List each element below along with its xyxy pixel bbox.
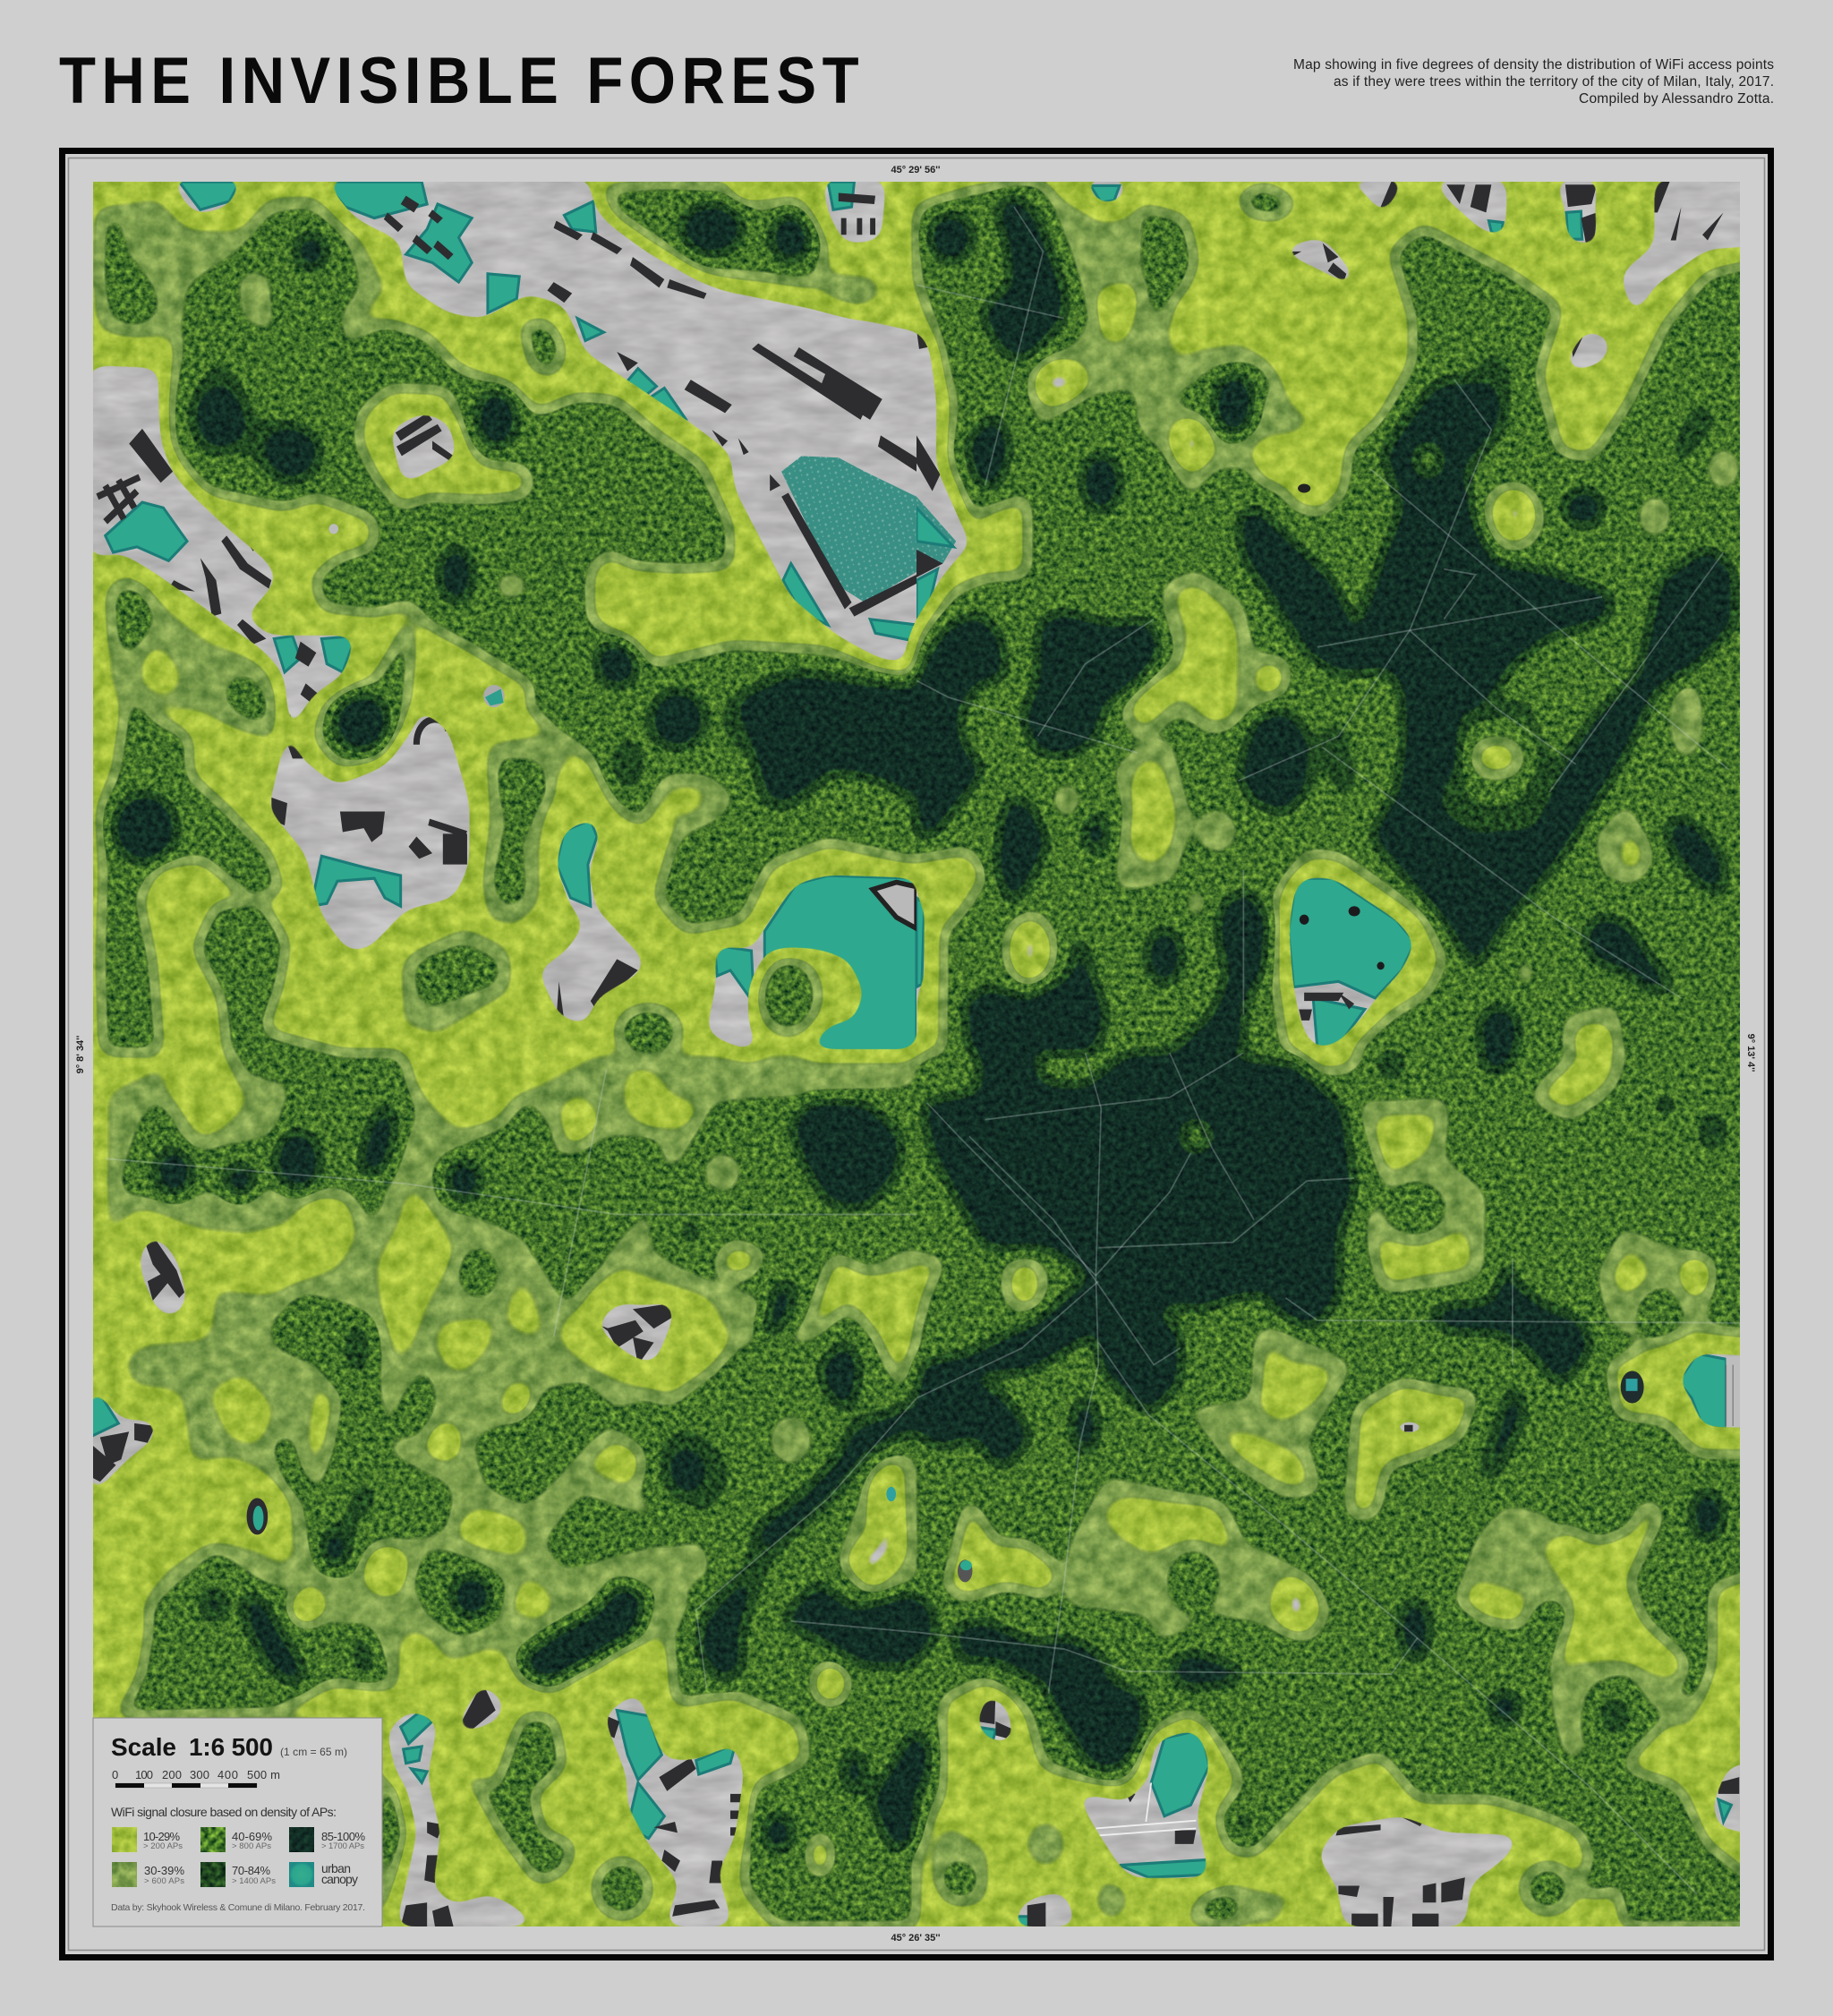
swatch label: 40-69%: > 800 APs bbox=[232, 1841, 271, 1851]
legend scale heading: 1:6 500 bbox=[189, 1733, 273, 1761]
description text block bbox=[1293, 57, 1774, 107]
swatch label: 70-84%: > 1400 APs bbox=[232, 1876, 276, 1886]
quadrant north-east density shapes bbox=[894, 182, 1740, 1076]
swatch label: 40-69%: 40-69% bbox=[232, 1830, 272, 1843]
coordinate label: left: 9° 8' 34'' bbox=[75, 1035, 86, 1073]
coordinate label: top: 45° 29' 56'' bbox=[891, 165, 941, 175]
quadrant south-east density shapes bbox=[893, 1029, 1740, 1926]
swatch label: 70-84% bbox=[232, 1864, 276, 1886]
legend panel bbox=[93, 1718, 382, 1926]
swatch label: 70-84%: 70-84% bbox=[232, 1864, 270, 1877]
swatch: 85-100% bbox=[289, 1827, 314, 1852]
scale bar labels bbox=[112, 1768, 280, 1781]
small urban clearings bbox=[247, 483, 1644, 1582]
swatch: 10-29% bbox=[112, 1827, 137, 1852]
legend subtitle: WiFi signal closure based on density of APs: bbox=[111, 1805, 337, 1819]
swatch label: 40-69% bbox=[232, 1830, 272, 1851]
description text block: Map showing in five degrees of density the distribution of WiFi access points bbox=[1293, 57, 1774, 73]
density layers: canopy closure contours bbox=[93, 182, 1740, 1926]
swatch label: 85-100%: 85-100% bbox=[321, 1830, 365, 1843]
scale bar bbox=[115, 1783, 257, 1788]
swatch label: 30-39%: > 600 APs bbox=[144, 1876, 184, 1886]
swatch label: 10-29%: > 200 APs bbox=[143, 1841, 183, 1851]
legend scale heading bbox=[111, 1733, 273, 1761]
swatch label: 30-39%: 30-39% bbox=[144, 1864, 184, 1877]
map of WiFi forest over Milan bbox=[93, 182, 1740, 1926]
swatch label: urban canopy bbox=[321, 1861, 358, 1886]
scale bar labels: 0 bbox=[112, 1768, 118, 1781]
road network over the dense canopy bbox=[106, 207, 1743, 1894]
scale bar labels: 200 bbox=[162, 1768, 182, 1781]
scale bar labels: 300 bbox=[190, 1768, 209, 1781]
coordinate label: right: 9° 13' 4'' bbox=[1745, 1034, 1756, 1072]
swatch: urban canopy bbox=[289, 1862, 314, 1887]
legend scale note: (1 cm = 65 m) bbox=[280, 1746, 347, 1758]
coordinate label: bottom: 45° 26' 35'' bbox=[891, 1933, 941, 1943]
quadrant north-west density shapes bbox=[93, 182, 941, 1078]
legend scale heading: Scale bbox=[111, 1733, 176, 1761]
swatch label: 85-100%: > 1700 APs bbox=[321, 1841, 364, 1851]
swatch label: 30-39% bbox=[144, 1864, 184, 1886]
scale bar labels: 500 m bbox=[247, 1768, 280, 1781]
urban ground layer: concrete, canopy and buildings bbox=[90, 179, 1745, 1930]
data credit: Data by: Skyhook Wireless & Comune di Milano. February 2017. bbox=[111, 1902, 365, 1913]
swatch label: urban canopy: urban bbox=[321, 1861, 351, 1875]
description text block: as if they were trees within the territory of the city of Milan, Italy, 2017. bbox=[1334, 74, 1774, 90]
title: THE INVISIBLE FOREST bbox=[59, 45, 865, 117]
quadrant south-west density shapes bbox=[93, 1029, 941, 1926]
swatch: 40-69% bbox=[200, 1827, 226, 1852]
swatch label: 85-100% bbox=[321, 1830, 365, 1851]
scale bar labels: 400 bbox=[217, 1768, 238, 1781]
swatch label: urban canopy: canopy bbox=[321, 1872, 358, 1886]
swatch: 70-84% bbox=[200, 1862, 226, 1887]
description text block: Compiled by Alessandro Zotta. bbox=[1579, 91, 1774, 107]
swatch label: 10-29%: 10-29% bbox=[143, 1830, 180, 1843]
swatch label: 10-29% bbox=[143, 1830, 183, 1851]
swatch: 30-39% bbox=[112, 1862, 137, 1887]
scale bar labels: 100 bbox=[135, 1768, 153, 1781]
